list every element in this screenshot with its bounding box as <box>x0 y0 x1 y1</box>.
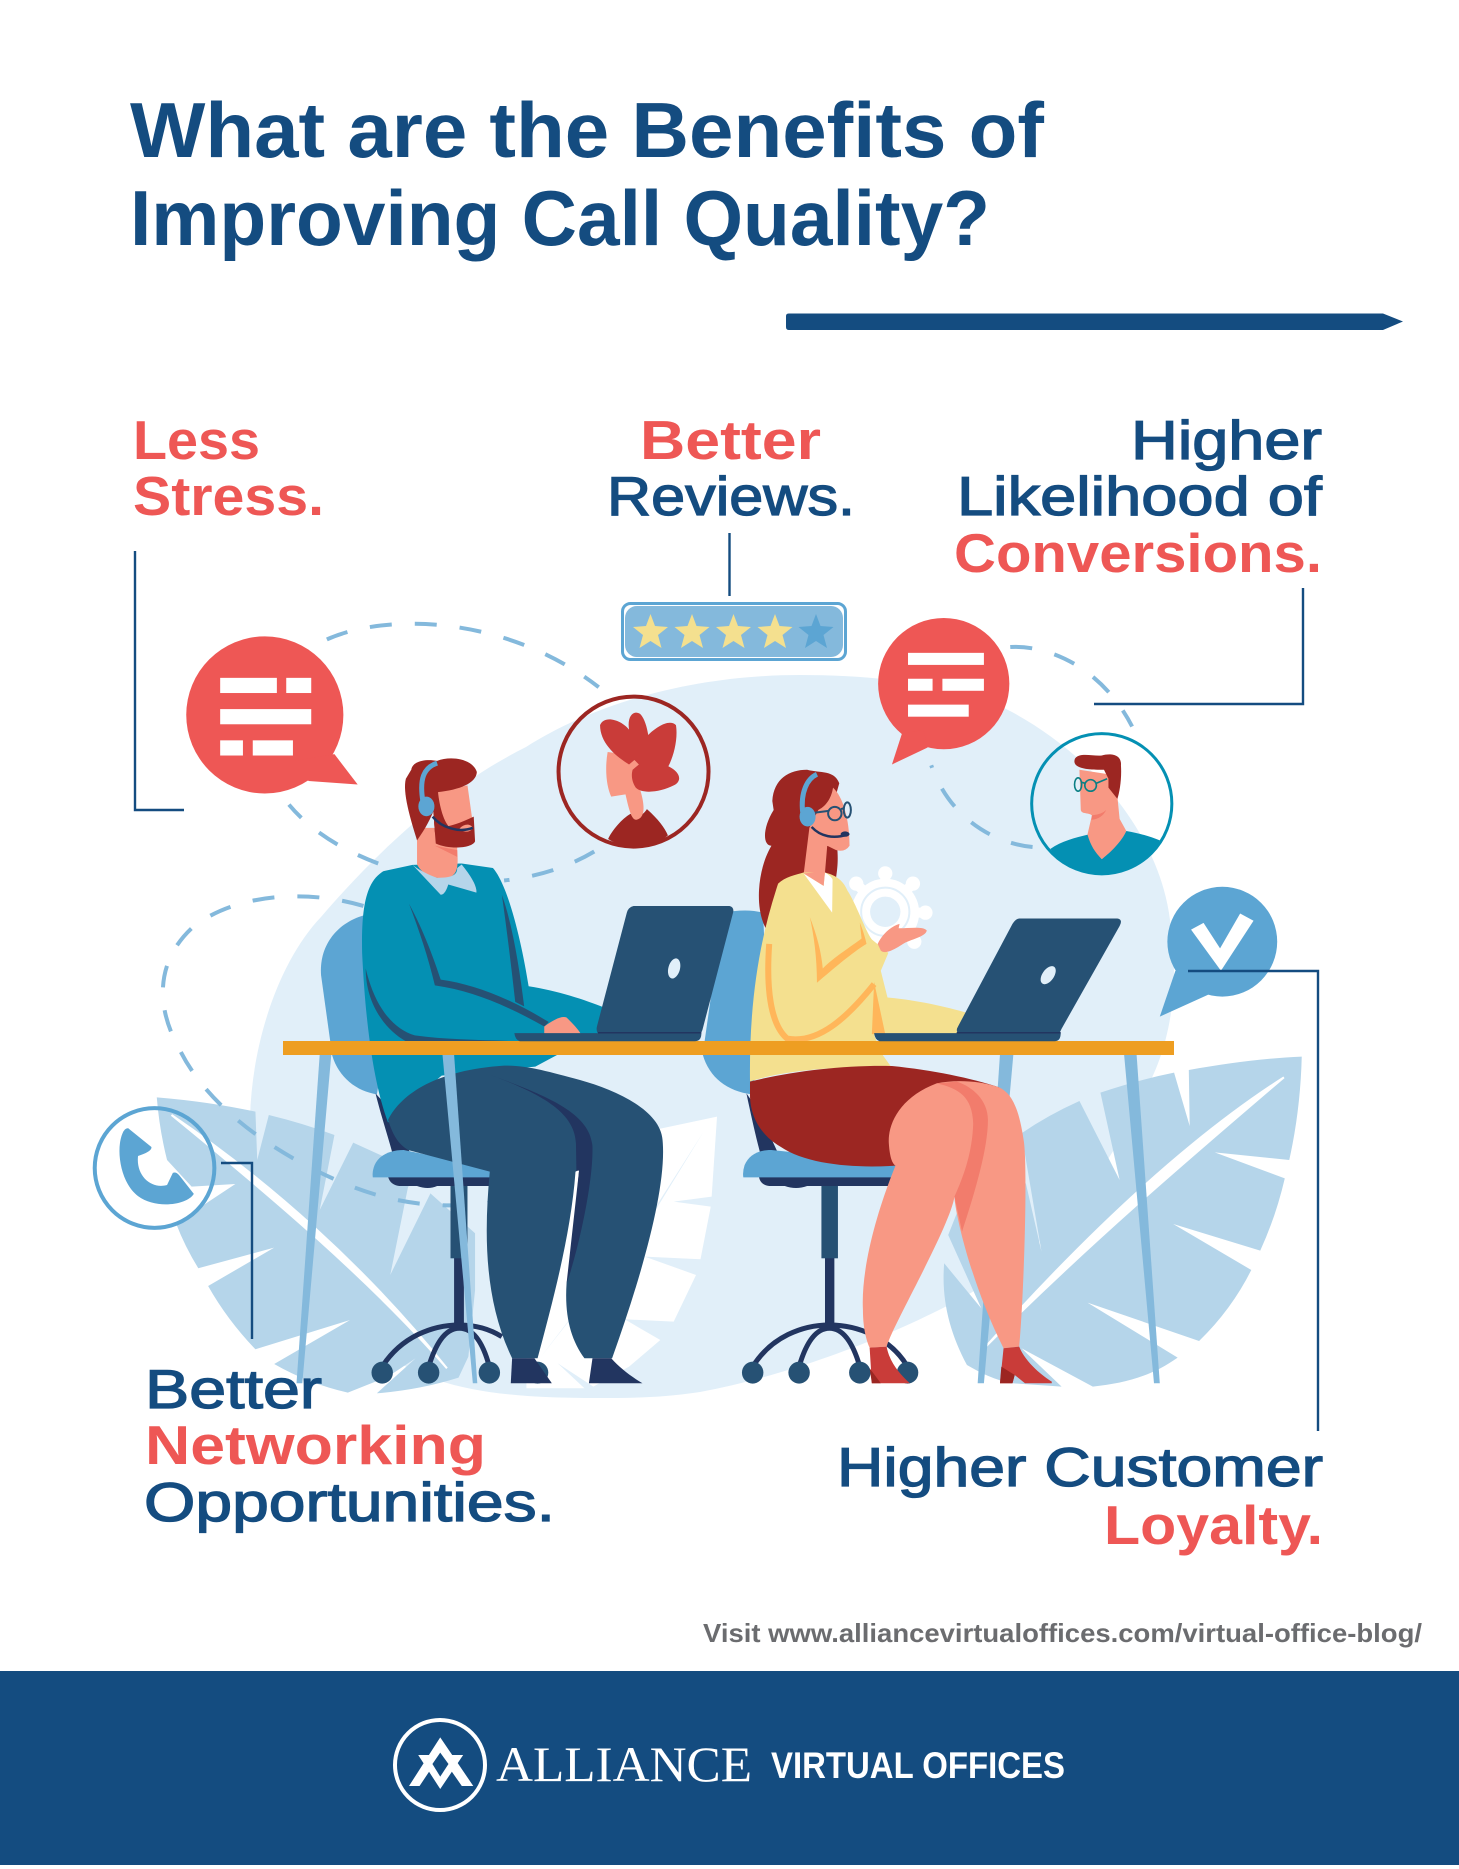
connector: customer loyalty <box>1188 971 1318 1431</box>
footer band <box>0 1671 1459 1865</box>
woman's skirt and legs <box>750 1066 1052 1383</box>
woman's top <box>750 872 968 1081</box>
avatar: man with glasses <box>1032 734 1172 875</box>
speech bubble: coral centre <box>878 618 1009 764</box>
label: higher customer loyalty <box>837 1436 1323 1556</box>
label: better reviews <box>607 409 855 527</box>
title: Improving Call Quality? <box>130 174 990 262</box>
label: better networking opportunities: Better <box>145 1358 322 1420</box>
man <box>362 758 663 1383</box>
arrow bar <box>786 314 1403 330</box>
label: better networking opportunities: Networking <box>145 1414 486 1476</box>
background blob <box>250 675 1174 1398</box>
man's laptop <box>514 906 733 1041</box>
speech bubble: coral left <box>186 636 358 793</box>
label: higher likelihood of conversions: Likelihood of <box>957 465 1323 527</box>
phone icon <box>95 1108 214 1228</box>
label: higher likelihood of conversions: Higher <box>1131 409 1322 471</box>
man's head <box>405 758 477 895</box>
label: better reviews: Reviews. <box>607 465 855 527</box>
left leaf <box>157 1097 475 1393</box>
right leaf <box>944 1057 1302 1387</box>
title: What are the Benefits of <box>130 86 1045 174</box>
connector: conversions <box>1094 588 1303 704</box>
man's trousers <box>388 1066 663 1383</box>
man's chair base <box>371 1093 548 1384</box>
dashed path: woman loop <box>931 647 1132 847</box>
website link text: Visit www.alliancevirtualoffices.com/virtual-office-blog/ <box>703 1618 1422 1648</box>
table top <box>283 1041 1174 1055</box>
man's sweater <box>362 864 605 1122</box>
table front legs <box>297 1054 477 1383</box>
rating box with stars <box>622 604 846 660</box>
gear <box>847 866 933 951</box>
label: less stress: Less <box>133 409 260 471</box>
logo: ALLIANCE <box>496 1736 752 1792</box>
logo: VIRTUAL OFFICES <box>771 1745 1065 1786</box>
speech bubble: check mark <box>1160 887 1277 1017</box>
label: less stress <box>133 409 324 527</box>
table legs back <box>978 1054 1160 1383</box>
title <box>130 86 1045 262</box>
connector: networking <box>221 1163 252 1339</box>
label: higher customer loyalty: Loyalty. <box>1104 1494 1323 1556</box>
woman's hair and head <box>759 770 851 931</box>
woman's chair back <box>703 910 767 1094</box>
connector: better reviews <box>728 533 731 596</box>
label: higher likelihood of conversions <box>954 409 1323 584</box>
label: better networking opportunities: Opportunities. <box>144 1471 555 1533</box>
avatar: red-haired woman <box>559 697 709 847</box>
connector: less stress <box>135 551 184 810</box>
woman <box>750 770 1052 1383</box>
logo <box>395 1720 1065 1810</box>
label: higher likelihood of conversions: Conversions. <box>954 522 1322 584</box>
dashed path: man loop <box>163 624 599 1205</box>
man's chair back <box>321 915 392 1094</box>
white leaf behind man <box>526 1117 717 1388</box>
label: better networking opportunities <box>144 1358 555 1533</box>
label: better reviews: Better <box>640 409 821 471</box>
woman's chair base <box>742 1093 918 1384</box>
label: higher customer loyalty: Higher Customer <box>837 1436 1323 1498</box>
label: less stress: Stress. <box>133 465 324 527</box>
woman's laptop <box>874 918 1121 1041</box>
